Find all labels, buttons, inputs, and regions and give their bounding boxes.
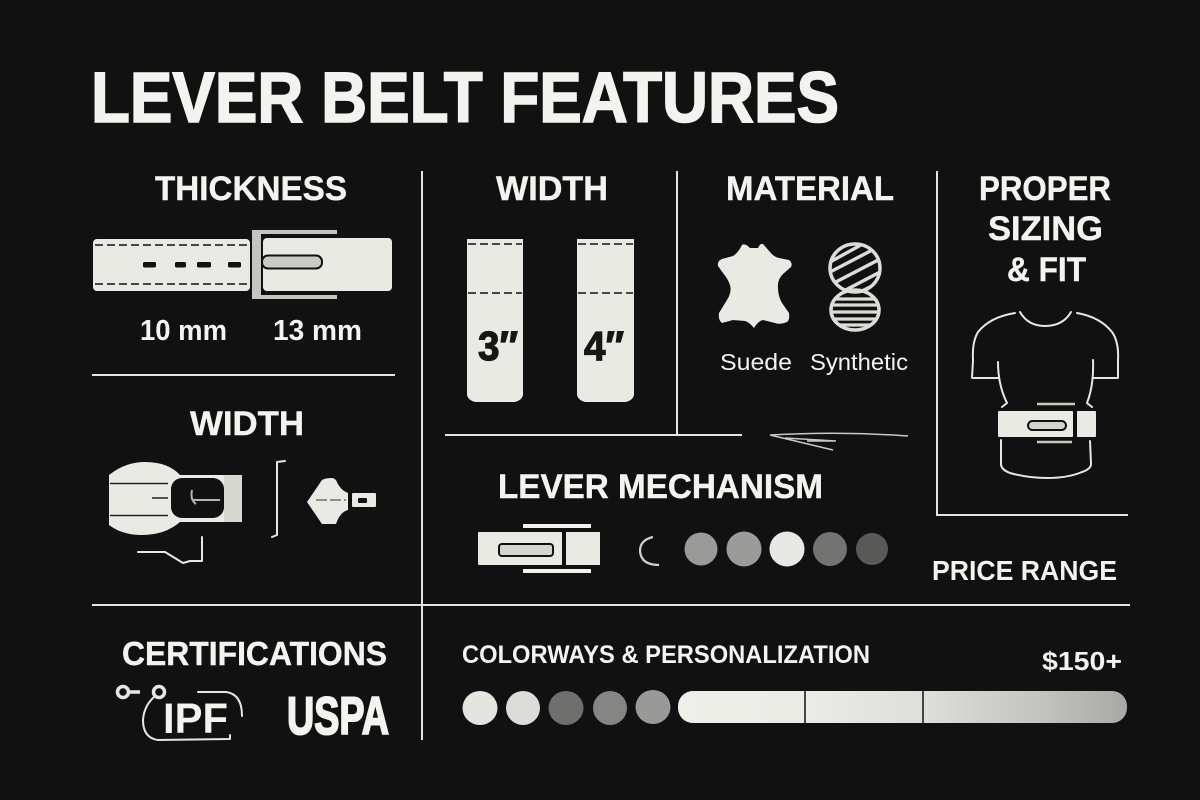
icon: bracket <box>272 461 285 537</box>
heading: and fit: & FIT <box>1007 251 1086 289</box>
heading: colorways and personalization: COLORWAYS & PERSONALIZATION <box>462 641 870 669</box>
decorative sketch mark <box>770 433 908 450</box>
panel: width middle <box>467 170 634 402</box>
logo: IPF: IPF <box>163 695 228 743</box>
icon: t-shirt with belt <box>972 312 1118 478</box>
panel: certifications <box>118 635 389 746</box>
icon: 4 inch strap <box>577 239 634 402</box>
icon: small lever <box>307 478 376 524</box>
lever colour swatches <box>684 532 888 566</box>
icon: suede hide <box>718 244 792 328</box>
heading: price range: PRICE RANGE <box>932 555 1117 586</box>
heading: width: WIDTH <box>496 170 608 208</box>
colour swatches <box>462 690 670 725</box>
heading: material: MATERIAL <box>726 170 894 208</box>
heading: sizing: SIZING <box>988 210 1103 248</box>
icon: 3 inch strap: 3″ <box>478 323 518 369</box>
icon: 4 inch strap: 4″ <box>584 323 624 369</box>
title: LEVER BELT FEATURES <box>91 59 839 138</box>
label: synthetic: Synthetic <box>810 349 908 375</box>
logo: IPF <box>118 686 242 743</box>
icon: open ring <box>640 537 659 565</box>
icon: belt with buckle <box>93 230 392 299</box>
panel: lever mechanism <box>478 468 888 573</box>
panel: thickness <box>93 170 392 347</box>
panel: proper sizing and fit <box>972 170 1118 478</box>
heading: width: WIDTH <box>190 405 304 443</box>
heading: proper: PROPER <box>979 170 1111 208</box>
price label: $150+ <box>1042 646 1122 676</box>
price gradient bar <box>678 691 1127 723</box>
panel: colorways and personalization <box>462 641 870 725</box>
label: suede: Suede <box>720 349 792 375</box>
icon: 3 inch strap <box>467 239 523 402</box>
panel: price bar <box>678 646 1127 723</box>
panel: material <box>718 170 908 450</box>
label: 10 mm: 10 mm <box>140 315 227 347</box>
logo: USPA: USPA <box>287 687 389 746</box>
heading: thickness: THICKNESS <box>155 170 347 208</box>
heading: lever mechanism: LEVER MECHANISM <box>498 468 823 506</box>
heading: certifications: CERTIFICATIONS <box>122 635 387 672</box>
icon: lever buckle <box>478 524 600 573</box>
icon: buckle top view <box>109 462 242 535</box>
icon: synthetic fibre <box>830 240 884 330</box>
icon: bent pointer line <box>138 537 202 563</box>
panel: width left <box>109 405 376 563</box>
label: 13 mm: 13 mm <box>273 315 362 347</box>
